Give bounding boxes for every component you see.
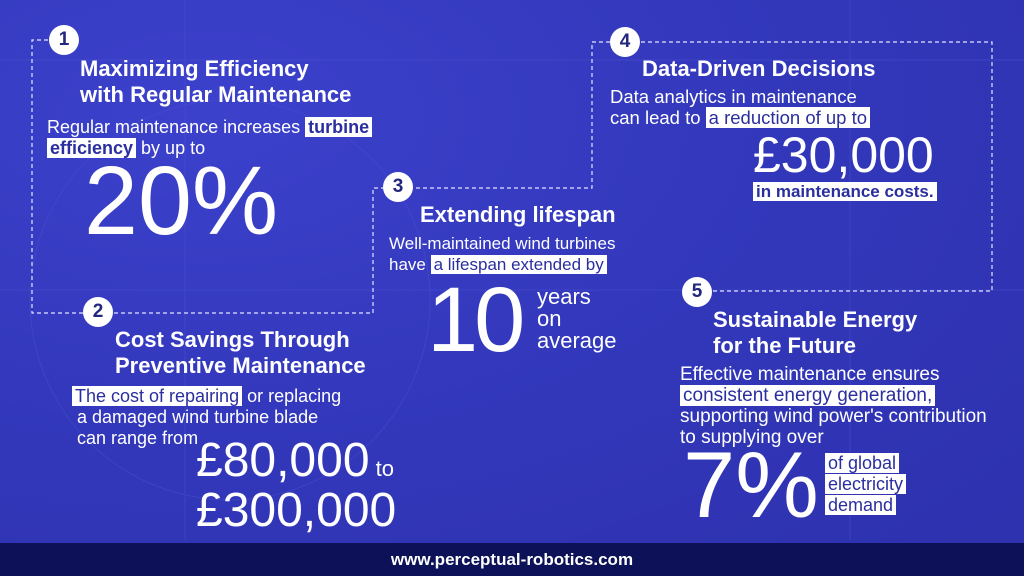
text 5: supporting wind power's contribution [680,406,987,427]
text 5: consistent energy generation, [683,385,932,406]
text 3: Well-maintained wind turbines [389,234,615,253]
text 5: to supplying over [680,427,824,448]
heading 5 [713,307,918,358]
label global demand [825,453,906,515]
heading 1: with Regular Maintenance [80,82,351,107]
text 2: a damaged wind turbine blade [77,407,318,427]
heading 4: Data-Driven Decisions [642,56,876,81]
text 2: can range from [77,428,198,448]
stat £30,000: £30,000 [753,127,934,183]
text 5: Effective maintenance ensures [680,364,939,385]
label global demand: demand [828,495,893,515]
footer: www.perceptual-robotics.com [391,550,633,569]
text 2 [72,386,341,448]
badge 5: 5 [692,281,702,302]
label global demand: electricity [828,474,903,494]
stat cost range: £300,000 [196,484,396,537]
text 2: The cost of repairing or replacing [75,386,341,406]
badge 2 [83,297,113,327]
heading 2 [115,327,366,378]
heading 1: Maximizing Efficiency [80,56,309,81]
stat 10 years: average [537,328,617,353]
panel 5: sustainable energy [680,277,987,537]
text 4 [610,86,870,128]
text 5 [680,364,987,448]
badge 2: 2 [93,301,103,322]
text 3: have a lifespan extended by [389,255,604,274]
panel 3: lifespan [383,172,617,371]
badge 3 [383,172,413,202]
text 4: can lead to a reduction of up to [610,107,867,128]
stat 7%: 7% [683,432,819,537]
badge 1 [49,25,79,55]
panel 2: cost savings [72,297,396,537]
badge 1: 1 [59,29,69,50]
label global demand: of global [828,453,896,473]
text 3 [389,234,615,274]
text 1 [47,117,372,158]
panel 4: data-driven [610,27,937,201]
badge 4: 4 [620,31,630,52]
badge 4 [610,27,640,57]
stat cost range: £80,000 to [196,434,394,487]
stat 10 years [427,269,617,371]
text 1: efficiency by up to [50,138,205,158]
stat 10 years: on [537,306,561,331]
heading 3: Extending lifespan [420,202,616,227]
heading 5: for the Future [713,333,856,358]
heading 2: Cost Savings Through [115,327,350,352]
heading 1 [80,56,351,107]
label maintenance costs: in maintenance costs. [756,182,934,201]
stat cost range [196,434,396,537]
stat 10 years: years [537,284,591,309]
heading 2: Preventive Maintenance [115,353,366,378]
stat 10 years: 10 [427,269,521,371]
heading 5: Sustainable Energy [713,307,917,332]
text 1: Regular maintenance increases turbine [47,117,369,137]
badge 3: 3 [393,176,403,197]
text 4: Data analytics in maintenance [610,86,857,107]
stat 20%: 20% [84,146,278,255]
badge 5 [682,277,712,307]
panel 1: efficiency [47,25,372,255]
footer [0,543,1024,576]
